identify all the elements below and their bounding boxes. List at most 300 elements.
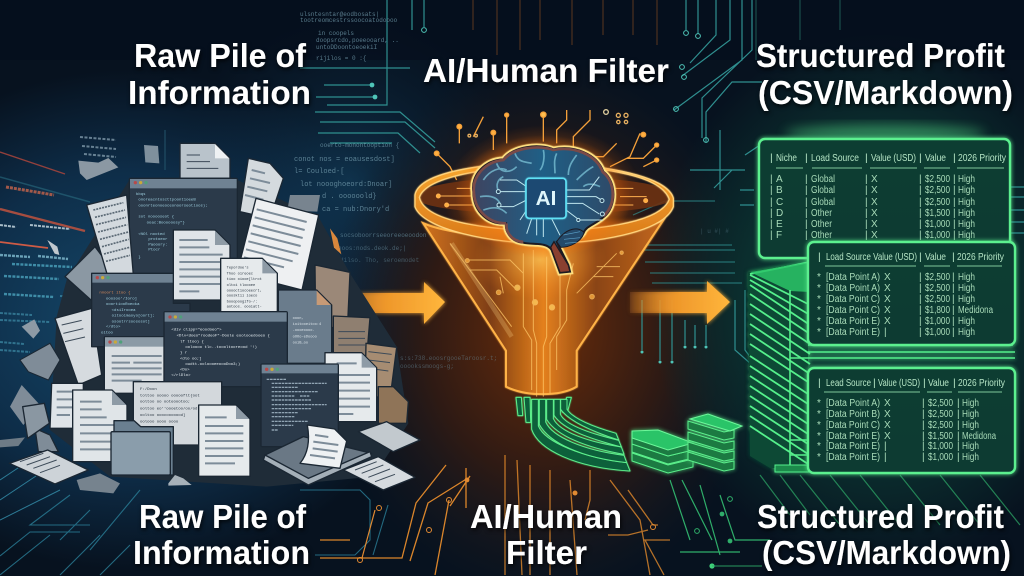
table 1 rows: | xyxy=(919,174,922,185)
window: back code window: bbqs xyxy=(136,192,146,197)
window: back code window: onoreacntoscttpoontioeeB xyxy=(138,198,196,203)
table 2 rows: | xyxy=(919,316,922,327)
table 1 rows: C xyxy=(776,197,783,208)
table 1 rows: | xyxy=(919,197,922,208)
table 2 rows: | xyxy=(919,272,922,283)
table 3 rows: * xyxy=(817,441,821,452)
table 2 rows: | xyxy=(952,305,955,316)
table 3 rows: | xyxy=(922,431,925,442)
table 2 rows: | xyxy=(884,327,887,338)
heading: filter top: AI/Human Filter xyxy=(423,52,669,89)
table 1 rows: A xyxy=(776,174,783,185)
table 2 rows: X xyxy=(884,316,891,327)
table 3 rows: $2,500 xyxy=(928,398,953,409)
table 2 rows: [Data Point A) xyxy=(826,283,880,294)
background code lines: left side xyxy=(0,130,165,520)
books: stack xyxy=(263,422,420,485)
table 1 rows: X xyxy=(871,185,878,196)
table 1 rows: X xyxy=(871,197,878,208)
doc: wide page: ooltoo eo''oooetoo/oo/od xyxy=(140,406,198,411)
table 3 rows: | xyxy=(957,420,960,431)
table 1 rows: | xyxy=(805,174,808,185)
table 1 xyxy=(759,125,1010,258)
table 2 rows: * xyxy=(817,294,821,305)
window: bottom right code window xyxy=(261,364,338,447)
window: back code window xyxy=(129,178,237,275)
window: front code window: <dlo oo;] xyxy=(180,356,202,361)
table 3 rows: | xyxy=(957,441,960,452)
window: left code window: osootrrsoososot] xyxy=(112,319,150,324)
table 1 rows: $2,500 xyxy=(925,174,950,185)
doc: text page: ooosktii ioeco xyxy=(227,294,257,299)
background code text: top center: d . oooooold} xyxy=(322,193,377,201)
table 2 rows: $1,800 xyxy=(925,305,950,316)
table 3 header: | xyxy=(818,377,821,389)
table 3 rows: High xyxy=(962,441,979,452)
heading: filter bottom: AI/Human xyxy=(470,498,622,535)
table 1 rows: | xyxy=(865,208,868,219)
table 2 rows: High xyxy=(958,272,975,283)
window: left code window: nnoort itoo { xyxy=(99,290,131,295)
table 3 rows: X xyxy=(884,431,891,442)
right circuit traces xyxy=(632,130,1024,372)
table 1 header: Load Source xyxy=(811,152,859,164)
table 3 header: | xyxy=(923,377,926,389)
funnel with AI brain xyxy=(415,110,673,471)
table 3 rows: | xyxy=(884,452,887,463)
table 2 rows: High xyxy=(958,316,975,327)
table 1 rows: $2,500 xyxy=(925,197,950,208)
table 1 rows: | xyxy=(805,219,808,230)
table 3 rows: | xyxy=(922,398,925,409)
background code text: top center: ooerto-monontooption { xyxy=(320,142,400,149)
heading: structured profit bottom: (CSV/Markdown) xyxy=(762,534,1011,571)
table 2 rows: * xyxy=(817,283,821,294)
orange circuit traces above brain xyxy=(434,110,659,180)
icon: folder xyxy=(111,421,173,475)
scrap: small left xyxy=(23,403,58,452)
table 1 rows: | xyxy=(953,208,956,219)
table 2 rows: Medidona xyxy=(958,305,993,316)
table 1 rows: | xyxy=(953,219,956,230)
table 2 rows: * xyxy=(817,305,821,316)
window: front code window: </rlDlo> xyxy=(171,373,191,378)
table 2 rows: X xyxy=(884,283,891,294)
paper: flat right xyxy=(343,457,415,490)
table 1 rows: High xyxy=(958,197,975,208)
background code text: top center: rijilos = 0 :{ xyxy=(316,55,367,62)
doc: gray page: ioitooeitoo:4 xyxy=(293,322,322,327)
background code text: top center: nsooreoos:nods.deok.de;| xyxy=(320,245,406,252)
table 2 rows: | xyxy=(919,305,922,316)
doc: text page: tioo oiooe[ltrot xyxy=(227,277,262,282)
AI chip: AI xyxy=(536,187,556,210)
table 2 xyxy=(808,242,1015,345)
table 1 rows: High xyxy=(958,230,975,241)
doc: gray page: ooiB_oo xyxy=(293,340,308,345)
window: front code window: lf ltoo) { xyxy=(180,340,205,345)
table 3 rows: | xyxy=(922,409,925,420)
funnel body xyxy=(423,220,663,394)
table 3 rows: * xyxy=(817,431,821,442)
table 2 rows: | xyxy=(952,283,955,294)
table 1 header: | xyxy=(919,152,922,164)
AI chip xyxy=(526,178,566,218)
heading: raw pile bottom: Information xyxy=(133,534,310,571)
table 1 rows: | xyxy=(953,185,956,196)
table 3 rows: High xyxy=(962,398,979,409)
table 1 rows: | xyxy=(865,197,868,208)
green paper stack xyxy=(748,262,1015,472)
table 1 rows: D xyxy=(776,208,783,219)
table 3 header: 2026 Priority xyxy=(958,377,1006,389)
doc: text page: oltoi tloooee xyxy=(227,283,255,288)
heading: filter bottom: Filter xyxy=(506,534,587,571)
sheet: rotated dense text xyxy=(87,195,133,278)
doc: text page: ooooctiocoeecrt, xyxy=(227,288,262,293)
table 3 rows: [Data Point E) xyxy=(826,441,880,452)
table 3 rows: | xyxy=(957,398,960,409)
table 1 header: Niche xyxy=(776,152,797,164)
table 3 rows: $2,500 xyxy=(928,409,953,420)
table 1 rows: | xyxy=(919,208,922,219)
table 1 rows: B xyxy=(776,185,783,196)
table 3 rows: High xyxy=(962,409,979,420)
heading: structured profit top xyxy=(756,37,1013,111)
brain xyxy=(455,135,632,273)
table 1 header: Value (USD) xyxy=(871,152,916,164)
paper: flat left xyxy=(9,450,88,484)
table 1 rows: | xyxy=(805,208,808,219)
table 2 rows: | xyxy=(952,294,955,305)
table 2 header: | xyxy=(952,251,955,263)
doc: center page xyxy=(173,230,230,300)
background code text: top center: lot noooghoeord:Dnoar] xyxy=(300,181,392,189)
table 3 header: Value xyxy=(928,377,949,389)
doc: wide page: F:/Doon xyxy=(140,387,157,392)
table 1 header xyxy=(770,152,1007,168)
background code text: top center: s:s:738.eoosrgooeTaroosr.t; xyxy=(400,355,497,362)
window: back code window: protoeor xyxy=(148,238,168,242)
funnel inner channels xyxy=(450,243,623,397)
doc: gray page: ooon, xyxy=(293,317,304,321)
funnel interior xyxy=(415,177,673,214)
window: back code window: ooac:Boooooosy"} xyxy=(147,221,185,226)
table 2 header: Value xyxy=(925,251,946,263)
doc: text page: Thoo oireoec xyxy=(227,272,253,277)
doc: text page: Tepordoe's xyxy=(227,266,249,271)
table 3 rows: * xyxy=(817,398,821,409)
table 1 rows: Other xyxy=(811,219,833,230)
table 1 rows: | xyxy=(770,208,773,219)
table 2 rows: High xyxy=(958,294,975,305)
table 3 rows: | xyxy=(884,441,887,452)
window: left code window xyxy=(92,273,190,347)
table 3 rows: [Data Point E) xyxy=(826,452,880,463)
window: front code window: <div clipp="eoodoeo"> xyxy=(171,328,222,333)
table 3 rows: $1,000 xyxy=(928,441,953,452)
table 1 rows: E xyxy=(776,219,783,230)
doc: lower left page xyxy=(73,390,127,462)
window: left code window: oitoo xyxy=(101,330,114,335)
table 1 header: | xyxy=(805,152,808,164)
table 1 rows: | xyxy=(953,230,956,241)
doc: large tilted page xyxy=(237,198,319,290)
table 2 rows: | xyxy=(919,294,922,305)
background code text: top center: untoDDoontoeoekiI xyxy=(316,44,377,51)
heading: raw pile top: Raw Pile of xyxy=(134,37,307,74)
table 3 header: | xyxy=(873,377,876,389)
heading: raw pile top xyxy=(128,37,311,111)
table 1 rows: F xyxy=(776,230,782,241)
window: front code window: } r xyxy=(180,350,188,355)
doc: gray page xyxy=(278,290,332,363)
tan papers right xyxy=(315,265,408,423)
table 2 header: 2026 Priority xyxy=(957,251,1005,263)
table 3 rows: | xyxy=(957,409,960,420)
table 2 rows: X xyxy=(884,294,891,305)
table 1 rows: | xyxy=(770,230,773,241)
table 1 rows: | xyxy=(770,219,773,230)
table 2 rows: | xyxy=(952,316,955,327)
table 2 rows: * xyxy=(817,327,821,338)
doc: small left page xyxy=(50,383,83,428)
table 3 rows: $1,000 xyxy=(928,452,953,463)
table 2 rows xyxy=(817,272,993,338)
window: left code window: </dto> xyxy=(106,325,121,330)
table 3 rows: [Data Point B) xyxy=(826,409,880,420)
table 3 header xyxy=(818,377,1006,392)
gray paper left xyxy=(55,247,115,385)
background code text: top center xyxy=(294,11,729,370)
table 2 rows: X xyxy=(884,305,891,316)
table 2 header xyxy=(818,251,1005,266)
window: front code window: oudtt-ooloooeeoooDoo3;) xyxy=(185,362,240,367)
table 2 header: | xyxy=(818,251,821,263)
table 2 rows: $1,000 xyxy=(925,327,950,338)
table 1 rows: Global xyxy=(811,174,835,185)
background code text: top center: dilso. Tho, seroemodet xyxy=(340,257,419,264)
table 1 rows: Other xyxy=(811,230,833,241)
doc: right white page xyxy=(325,353,377,422)
window: left code window: ooosoo'/Ioro] xyxy=(106,296,137,301)
table 1 rows: High xyxy=(958,219,975,230)
table 3 rows: $1,500 xyxy=(928,431,953,442)
table 2 header: | xyxy=(919,251,922,263)
arrow: funnel to tables xyxy=(630,281,730,324)
table 3 xyxy=(808,368,1015,473)
top sheet xyxy=(180,143,230,178)
table 2 header: Load Source Value (USD) xyxy=(826,251,917,263)
table 2 rows: [Data Point E) xyxy=(826,327,880,338)
doc: text page xyxy=(221,258,277,313)
table 3 rows xyxy=(817,398,996,463)
table 3 rows: [Data Point E) xyxy=(826,431,880,442)
table 3 rows: * xyxy=(817,409,821,420)
heading: structured profit bottom xyxy=(757,498,1011,571)
doc: wide page: ooltoo ooocooooood] xyxy=(140,413,185,418)
doc: curled page xyxy=(300,425,347,468)
background code text: top center: conot nos = eoausesdost] xyxy=(294,156,395,164)
window: left code window: ooortiooRoeoka xyxy=(106,302,140,307)
table 3 rows: [Data Point A) xyxy=(826,398,880,409)
table 3 header: | xyxy=(953,377,956,389)
table 1 header: | xyxy=(953,152,956,164)
background code text: top center: in coopels xyxy=(318,30,354,37)
table 1 rows: Other xyxy=(811,208,833,219)
doc: wide page: ooltoo oo ooteoootoo; xyxy=(140,400,190,405)
table 2 rows: * xyxy=(817,272,821,283)
table 1 rows: | xyxy=(865,174,868,185)
table 3 rows: X xyxy=(884,409,891,420)
background code text: top center: ca = nub:Dnory'd xyxy=(322,206,389,214)
table 2 rows: | xyxy=(952,272,955,283)
doc: text page: aotoos. oooiatt- xyxy=(227,305,262,310)
table 2 rows: [Data Point E) xyxy=(826,316,880,327)
background code text: top center: | u #| # xyxy=(700,228,729,235)
table 3 rows: | xyxy=(922,441,925,452)
table 2 rows: $2,500 xyxy=(925,294,950,305)
table 2 rows: [Data Point C) xyxy=(826,294,880,305)
table 3 rows: X xyxy=(884,398,891,409)
table 2 rows: | xyxy=(919,327,922,338)
table 1 rows: | xyxy=(770,174,773,185)
bottom circuit traces xyxy=(0,455,1020,575)
table 1 rows: | xyxy=(919,230,922,241)
table 2 rows: * xyxy=(817,316,821,327)
table 2 rows: $2,500 xyxy=(925,283,950,294)
window: back code window: ooonrteonoeoceonoorseotioos); xyxy=(138,203,208,208)
table 1 rows: Global xyxy=(811,197,835,208)
background code text: top center: socsoboorrseeoreeoeoodon xyxy=(340,232,427,239)
heading: structured profit top: Structured Profit xyxy=(756,37,1005,74)
funnel rim xyxy=(415,163,673,243)
doc: wide page: toltoo ooooo oooooflt{oot xyxy=(140,394,200,399)
background code text: top center: ooookssmoogs-g; xyxy=(400,363,454,370)
table 1 rows xyxy=(770,174,975,241)
doc: lower center page xyxy=(199,405,250,476)
table 1 rows: | xyxy=(865,219,868,230)
table 1 rows: $1,000 xyxy=(925,230,950,241)
doc: text page: booopoogifo-/: xyxy=(227,299,257,304)
table 2 rows: [Data Point C) xyxy=(826,305,880,316)
table 1 rows: $2,500 xyxy=(925,185,950,196)
table 3 header: Lead Source xyxy=(826,377,871,389)
table 3 rows: * xyxy=(817,420,821,431)
table 3 rows: High xyxy=(962,420,979,431)
table 2 rows: | xyxy=(952,327,955,338)
background circuit traces: left and top xyxy=(300,0,840,153)
table 1 rows: X xyxy=(871,174,878,185)
rotated sheet top right xyxy=(240,158,283,218)
window: back code window: Paooory: xyxy=(148,243,167,247)
table 2 rows: [Data Point A) xyxy=(826,272,880,283)
window: back code window: } xyxy=(138,255,141,260)
table 1 rows: X xyxy=(871,230,878,241)
table 1 rows: $1,000 xyxy=(925,219,950,230)
window: back code window: sot nooooseot { xyxy=(138,215,175,220)
table 1 rows: $1,500 xyxy=(925,208,950,219)
table 3 rows: Medidona xyxy=(962,431,996,442)
green data strands xyxy=(516,397,630,471)
table 1 rows: | xyxy=(865,185,868,196)
background code text: top center: doopsrcdo,poeeooard, .. xyxy=(316,37,399,44)
table 1 rows: High xyxy=(958,185,975,196)
window: light window xyxy=(104,337,168,393)
background code text: top center: tootreomcestrssoocoatodoooo xyxy=(300,17,398,24)
table 3 rows: $2,500 xyxy=(928,420,953,431)
green small stack 1 xyxy=(632,430,693,473)
table 2 rows: High xyxy=(958,283,975,294)
table 3 rows: | xyxy=(957,431,960,442)
table 3 rows: High xyxy=(962,452,979,463)
heading: raw pile bottom xyxy=(133,498,310,571)
table 3 rows: | xyxy=(957,452,960,463)
doc: gray page: -oooeoooo. xyxy=(293,329,315,333)
doc: gray page: oOOo-eDoooo xyxy=(293,335,317,339)
window: left code window: oitooimaoyo[oort]; xyxy=(112,314,155,319)
table 1 rows: | xyxy=(953,174,956,185)
table 3 header: Value (USD) xyxy=(878,377,920,389)
heading: raw pile top: Information xyxy=(128,74,311,111)
table 1 header: | xyxy=(770,152,773,164)
heading: filter bottom xyxy=(470,498,622,571)
heading: structured profit top: (CSV/Markdown) xyxy=(758,74,1013,111)
table 1 header: Value xyxy=(925,152,946,164)
glow around funnel xyxy=(423,125,663,387)
table 3 rows: X xyxy=(884,420,891,431)
window: front code window: <Do> xyxy=(180,368,190,373)
green small stack 2 xyxy=(688,414,742,471)
table 3 rows: [Data Point C) xyxy=(826,420,880,431)
table 1 rows: | xyxy=(770,185,773,196)
background code text: top center: l= Couloed-[ xyxy=(294,168,344,176)
window: front code window: ooloooo tlc..toooltooreood '!) xyxy=(185,345,257,350)
table 1 rows: | xyxy=(805,197,808,208)
window: back code window: Ptocr xyxy=(148,249,161,253)
panel: raw pile of documents xyxy=(0,143,420,493)
table 3 rows: | xyxy=(922,420,925,431)
table 1 rows: X xyxy=(871,219,878,230)
heading: raw pile bottom: Raw Pile of xyxy=(139,498,307,535)
funnel light under brain xyxy=(473,220,607,300)
table 1 header: 2026 Priority xyxy=(958,152,1007,164)
table 3 rows: * xyxy=(817,452,821,463)
table 1 rows: | xyxy=(770,197,773,208)
table 1 rows: X xyxy=(871,208,878,219)
table 2 rows: | xyxy=(919,283,922,294)
table 1 rows: | xyxy=(865,230,868,241)
table 1 rows: | xyxy=(953,197,956,208)
table 2 rows: High xyxy=(958,327,975,338)
doc: wide page: oolooo oooo oooo xyxy=(140,420,179,425)
doc: wide page xyxy=(133,382,222,445)
interior circuit lines xyxy=(436,188,648,207)
table 1 rows: | xyxy=(805,230,808,241)
table 1 header: | xyxy=(865,152,868,164)
window: front code window xyxy=(164,312,287,387)
table 1 rows: | xyxy=(805,185,808,196)
table 1 rows: | xyxy=(919,219,922,230)
window: back code window: <%Ol nooted xyxy=(138,232,165,237)
table 2 rows: $1,000 xyxy=(925,316,950,327)
table 2 rows: $2,500 xyxy=(925,272,950,283)
table 3 rows: | xyxy=(922,452,925,463)
table 1 rows: High xyxy=(958,174,975,185)
arrow: input to funnel xyxy=(336,282,445,324)
table 1 rows: | xyxy=(919,185,922,196)
table 1 rows: Global xyxy=(811,185,835,196)
